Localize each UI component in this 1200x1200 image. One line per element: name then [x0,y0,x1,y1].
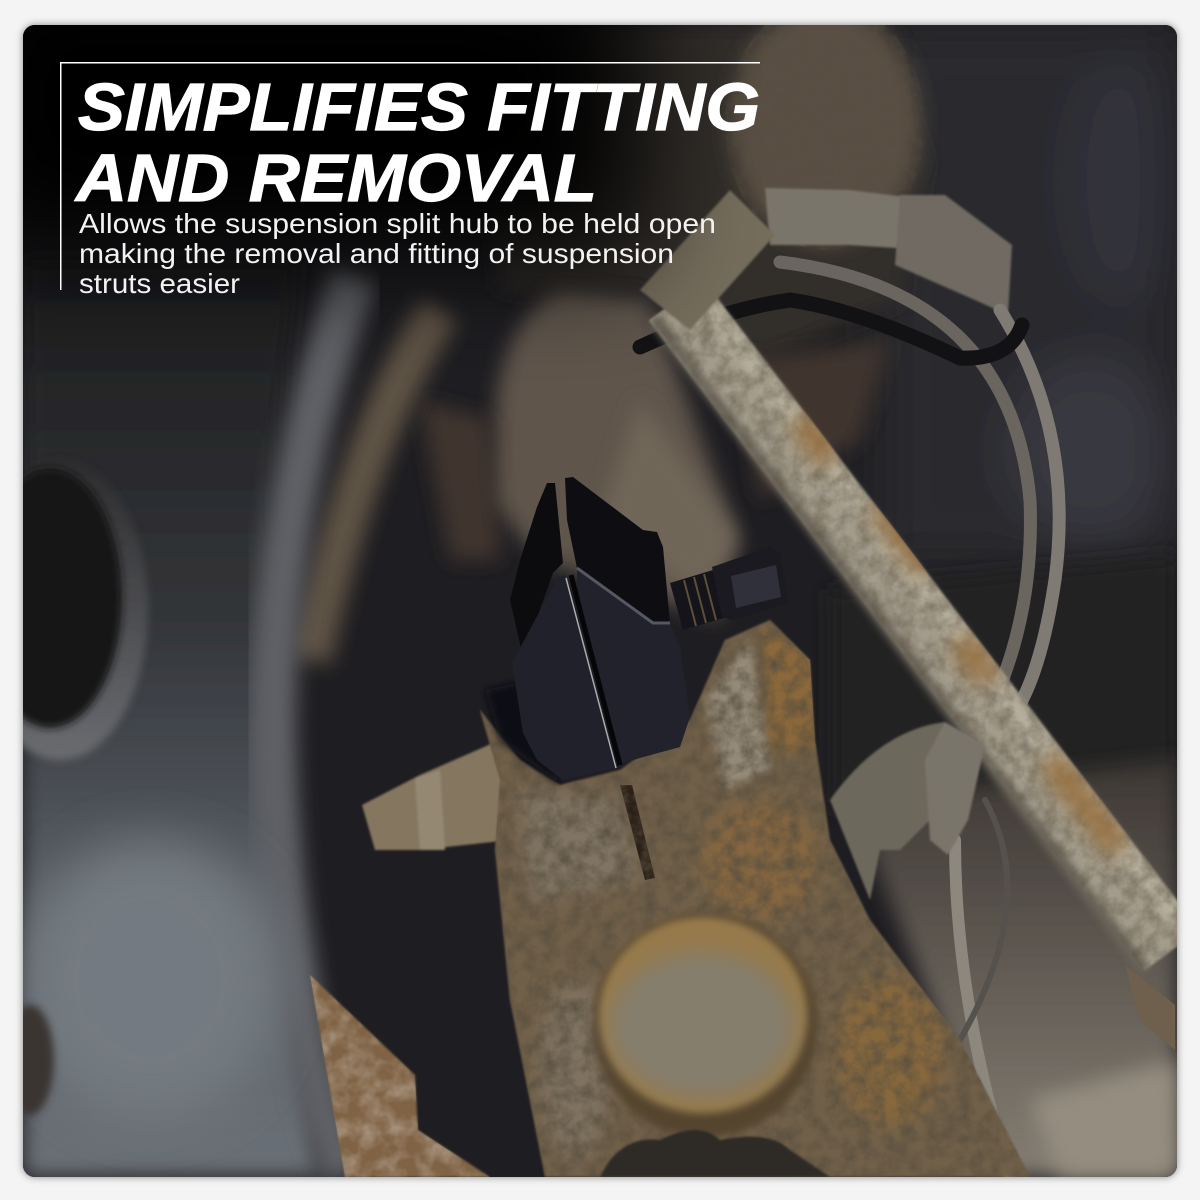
rust band lower left [310,975,490,1177]
upper right dark tyre [880,25,1180,565]
front right face [577,568,690,763]
spring arc [310,310,440,660]
rusty rod [640,270,1200,1050]
title [74,70,760,216]
description text: making the removal and fitting of suspension [79,238,674,269]
description text [79,208,716,299]
rubber boot top centre [503,25,930,352]
title: SIMPLIFIES FITTING [78,70,760,145]
black hub spreader tool [510,477,788,780]
threaded stud [362,740,510,850]
description text: Allows the suspension split hub to be held open [79,208,716,239]
rear right jaw [565,477,670,623]
rear left jaw [510,483,563,657]
title: AND REMOVAL [74,141,597,216]
speed sensor clip [830,722,985,900]
ball joint [593,913,817,1137]
brake hose and cables [640,188,1059,1177]
title frame lines [60,62,760,290]
strut body [420,290,890,620]
lower right floor [874,593,1177,1177]
front left face [512,575,615,780]
wheel hub [0,260,355,1177]
dark vignette behind title [0,0,640,260]
bottom rubber boot ribs [600,1130,830,1177]
tool shadow [485,680,560,785]
bolt head [712,554,750,620]
threaded bolt [670,570,727,630]
description text: struts easier [79,268,240,299]
hose clamp [640,190,775,330]
control arm [480,620,1040,1180]
